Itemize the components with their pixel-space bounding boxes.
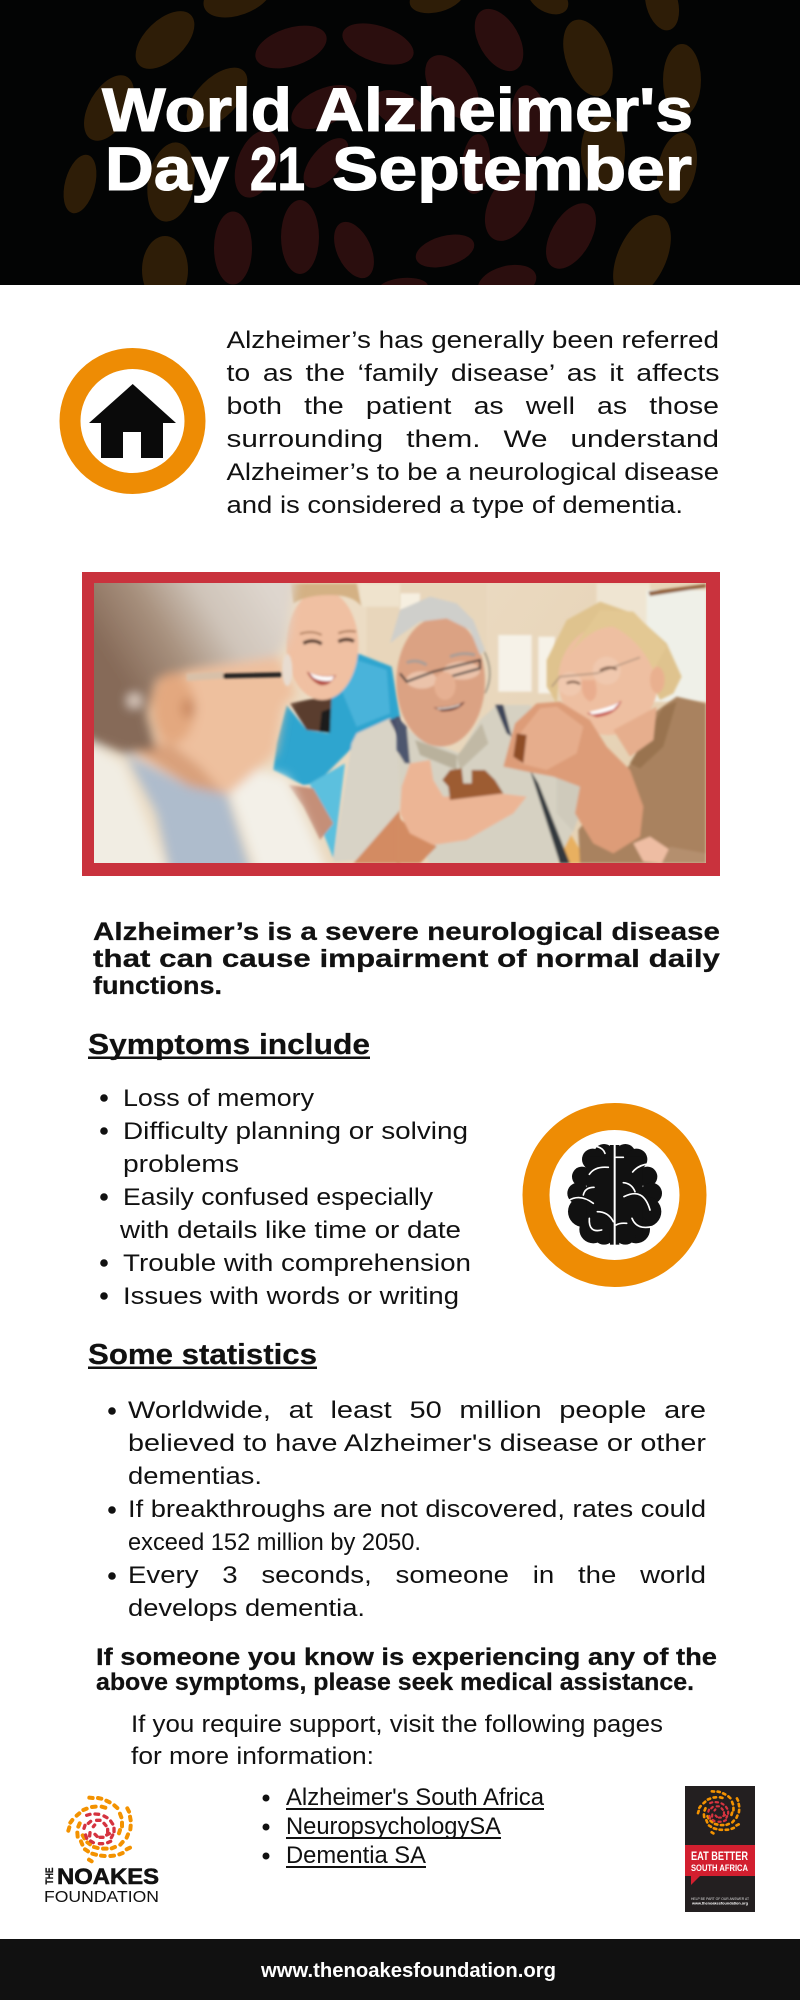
- bold statement: that can cause impairment of normal daily: [93, 945, 720, 973]
- symptoms list: problems: [123, 1151, 239, 1178]
- statistics list: develops dementia.: [128, 1595, 365, 1622]
- sweater: [578, 697, 706, 863]
- logo: The Noakes Foundation: [44, 1798, 159, 1906]
- symptoms list: Issues with words or writing: [123, 1283, 459, 1310]
- intro text block: and is considered a type of dementia.: [226, 492, 683, 519]
- title: Day: [105, 135, 229, 203]
- logo: Eat Better South Africa banner: [685, 1786, 755, 1912]
- symptoms list: Trouble with comprehension: [123, 1250, 471, 1277]
- nurse and man shirt: [273, 583, 400, 863]
- statistics list: Every 3 seconds, someone in the world: [128, 1562, 706, 1589]
- man shirt: [397, 705, 590, 863]
- support links list: NeuropsychologySA: [286, 1813, 501, 1840]
- bottom hand: [633, 837, 670, 863]
- symptoms list: Difficulty planning or solving: [123, 1118, 468, 1145]
- title: [102, 76, 693, 203]
- heading: symptoms include: Symptoms include: [88, 1029, 370, 1061]
- raised arm: [503, 702, 643, 853]
- bold statement: Alzheimer’s is a severe neurological disease: [93, 918, 720, 946]
- title: 21: [250, 135, 305, 203]
- header banner: [0, 0, 800, 308]
- bold call to action: above symptoms, please seek medical assistance.: [96, 1669, 694, 1696]
- blonde woman: [547, 602, 682, 703]
- support links list: Alzheimer's South Africa: [286, 1784, 545, 1811]
- support links list: [262, 1784, 545, 1869]
- icon: brain in orange ring: [536, 1116, 693, 1274]
- title: September: [332, 135, 692, 203]
- banner spiral: [698, 1791, 739, 1833]
- heading: some statistics: Some statistics: [88, 1339, 317, 1371]
- bold call to action: [96, 1644, 717, 1696]
- logo: Eat Better South Africa banner: SOUTH AFRICA: [691, 1863, 748, 1874]
- logo: The Noakes Foundation: THE: [44, 1868, 56, 1884]
- support text: [131, 1711, 663, 1770]
- statistics list: dementias.: [128, 1463, 262, 1490]
- shirt sleeve: [573, 826, 574, 827]
- logo: The Noakes Foundation: NOAKES: [57, 1864, 159, 1889]
- puzzle: [442, 768, 503, 800]
- bold statement: functions.: [93, 972, 222, 1000]
- symptoms list: Easily confused especially: [123, 1184, 433, 1211]
- intro text block: surrounding them. We understand: [226, 426, 719, 453]
- lower hand: [400, 760, 527, 845]
- left foreground woman: [94, 583, 329, 863]
- logo spiral: [68, 1798, 131, 1861]
- man head: [484, 652, 490, 693]
- lower arm: [397, 817, 437, 863]
- intro text block: Alzheimer’s has generally been referred: [226, 327, 719, 354]
- support text: for more information:: [131, 1743, 374, 1770]
- intro text block: to as the ‘family disease’ as it affects: [226, 360, 720, 387]
- symptoms list: [100, 1085, 471, 1310]
- title: World: [102, 76, 292, 144]
- intro text block: both the patient as well as those: [226, 393, 719, 420]
- logo: Eat Better South Africa banner: HELP BE PART OF OUR ANSWER AT: [691, 1896, 749, 1901]
- statistics list: believed to have Alzheimer's disease or other: [128, 1430, 706, 1457]
- photo: family with puzzle in red frame: [77, 567, 720, 880]
- support links list: Dementia SA: [286, 1842, 426, 1869]
- statistics list: If breakthroughs are not discovered, rates could: [128, 1496, 706, 1523]
- footer url: www.thenoakesfoundation.org: [260, 1960, 556, 1982]
- header pattern: brown and red seed shapes: [58, 0, 703, 308]
- title: Alzheimer's: [315, 76, 693, 144]
- support text: If you require support, visit the following pages: [131, 1711, 663, 1738]
- right side people: [390, 597, 706, 863]
- logo: Eat Better South Africa banner: www.thenoakesfoundation.org: [691, 1900, 749, 1906]
- logo: Eat Better South Africa banner: EAT BETTER: [691, 1849, 748, 1863]
- intro text block: [226, 327, 720, 519]
- logo: The Noakes Foundation: FOUNDATION: [44, 1889, 159, 1906]
- bold call to action: If someone you know is experiencing any of the: [96, 1644, 717, 1671]
- statistics list: Worldwide, at least 50 million people are: [128, 1397, 706, 1424]
- icon: house in orange ring: [70, 358, 195, 484]
- symptoms list: with details like time or date: [119, 1217, 461, 1244]
- intro text block: Alzheimer’s to be a neurological disease: [226, 459, 719, 486]
- statistics list: [108, 1397, 706, 1622]
- footer bar: [0, 1939, 800, 2000]
- bold statement: [93, 918, 720, 1000]
- statistics list: exceed 152 million by 2050.: [128, 1529, 421, 1556]
- symptoms list: Loss of memory: [123, 1085, 314, 1112]
